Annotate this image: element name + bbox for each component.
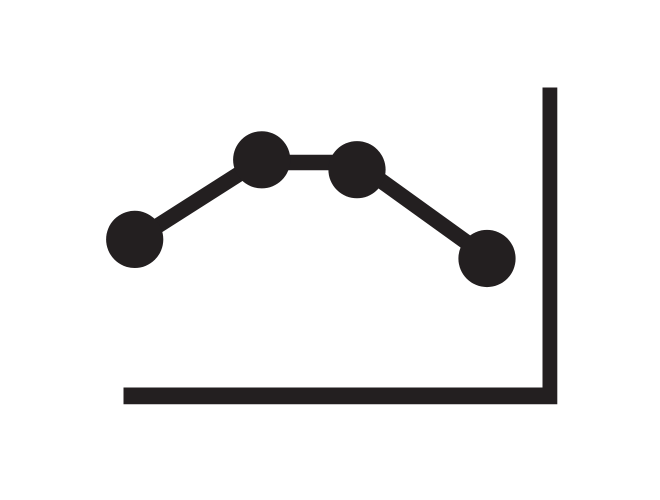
line segments: [135, 160, 487, 257]
point 2: [233, 131, 290, 188]
segment 1: [135, 160, 262, 240]
point 1: [106, 211, 163, 268]
segment 2: [262, 155, 357, 170]
data points: [106, 131, 516, 287]
segment 3: [357, 163, 487, 257]
point 4: [458, 230, 516, 287]
chart axes: [124, 88, 557, 404]
point 3: [328, 141, 386, 198]
